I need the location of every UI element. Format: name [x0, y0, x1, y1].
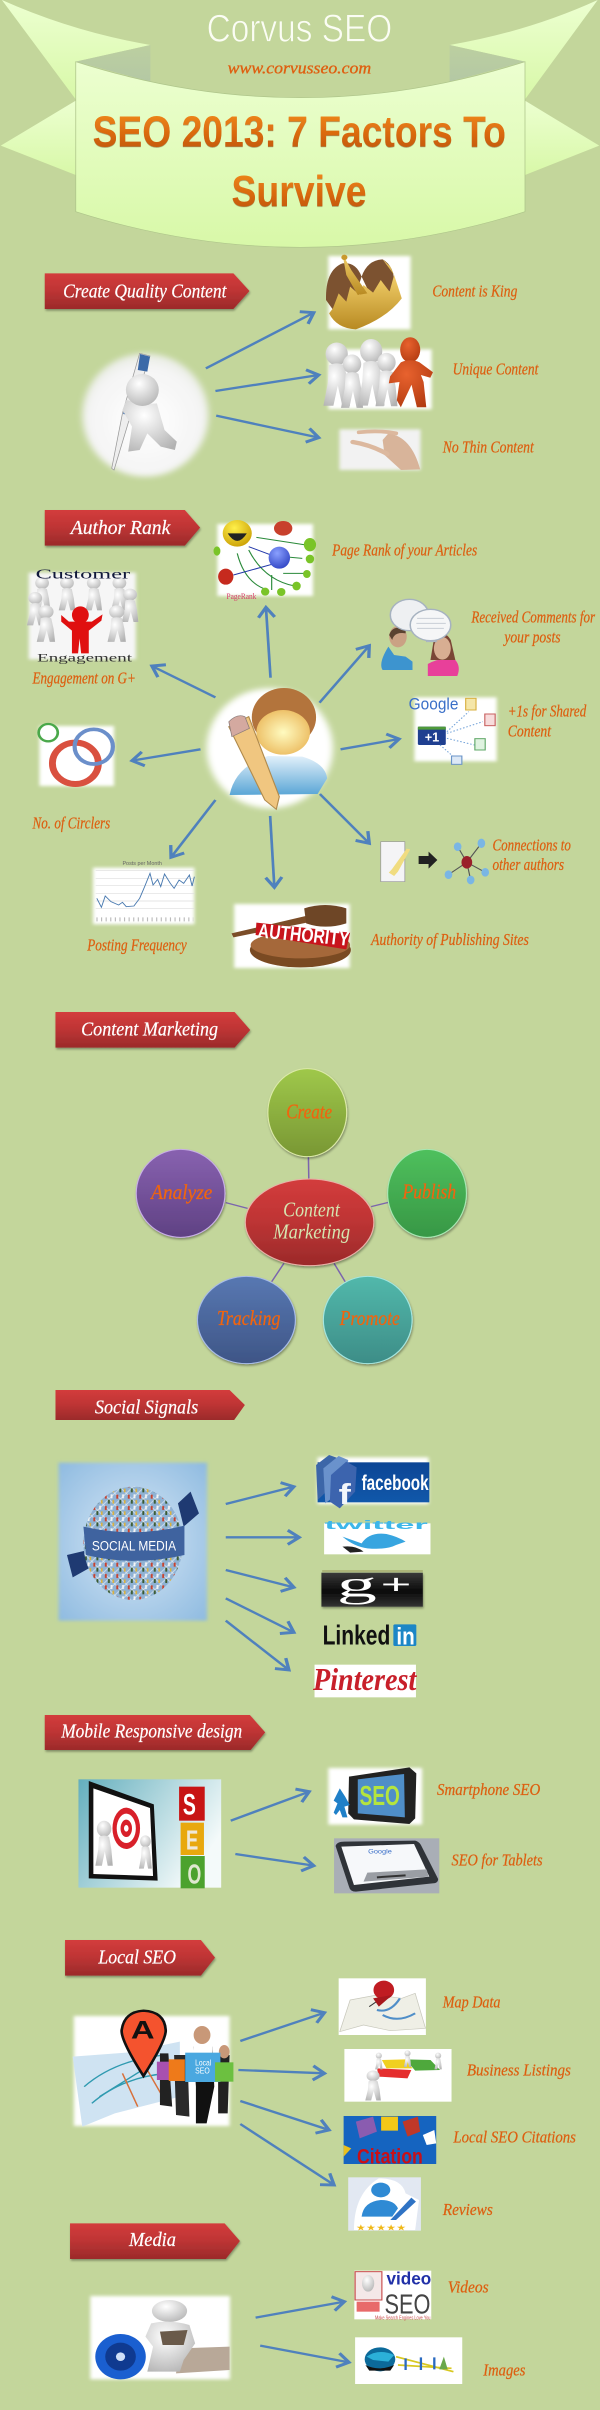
- arrow: to map data: [240, 2013, 324, 2041]
- text: content is king: Content is King: [432, 282, 517, 300]
- icon: business listings puzzle: [344, 2049, 452, 2102]
- heading: media: Media: [128, 2228, 176, 2251]
- ribbon right back tail: [450, 0, 598, 99]
- icon: smartphone seo: SEO: [360, 1781, 400, 1811]
- node: analyze: Analyze: [149, 1180, 212, 1204]
- icon: video seo: SEO: [385, 2289, 430, 2320]
- logo: linkedin: in: [396, 1624, 415, 1650]
- title: Survive: [232, 167, 367, 215]
- chart: posting frequency: Posts per Month: [122, 861, 162, 867]
- heading: social signals: Social Signals: [95, 1396, 198, 1418]
- logo: google plus: +: [381, 1570, 411, 1600]
- logo: pinterest: Pinterest: [312, 1662, 417, 1697]
- ribbon left back tail: [2, 0, 150, 99]
- text: unique content: Unique Content: [453, 360, 539, 378]
- text: connections to other authors: [492, 836, 571, 874]
- image: media figure with film reel: [90, 2296, 230, 2379]
- arrow: to local citations: [240, 2101, 329, 2130]
- icon: smartphone seo: [328, 1767, 422, 1825]
- text: map data: Map Data: [442, 1992, 501, 2011]
- arrow: to business listings: [238, 2070, 324, 2073]
- arrow: to videos: [256, 2302, 344, 2318]
- arrow: upper right: [320, 646, 369, 703]
- icon: citation: [344, 2116, 436, 2168]
- logo: linkedin: Linked: [323, 1620, 390, 1651]
- arrow: to unique content: [215, 375, 319, 391]
- heading: author rank: [45, 510, 200, 546]
- node: tracking: Tracking: [217, 1306, 280, 1330]
- icon: authority gavel: [232, 904, 351, 968]
- arrow: to google plus: [226, 1570, 294, 1587]
- icon: tablet seo: Google: [368, 1848, 392, 1856]
- text: authority of publishing sites: Authority of Publishing Sites: [370, 930, 529, 949]
- icon: google plus one: +1: [425, 731, 439, 745]
- logo: facebook: f: [339, 1478, 352, 1511]
- icon: map with pin: [339, 1978, 426, 2035]
- heading: content marketing: Content Marketing: [81, 1018, 218, 1040]
- heading: create quality content: [45, 273, 249, 309]
- heading: content marketing: [55, 1012, 250, 1048]
- arrow: to twitter: [226, 1534, 299, 1541]
- text: videos: Videos: [448, 2277, 489, 2296]
- image: mobile seo tablet and cubes: [78, 1779, 221, 1890]
- heading: social signals: [55, 1390, 245, 1420]
- icon: unique content figures: [323, 337, 433, 409]
- text: seo for tablets: SEO for Tablets: [452, 1851, 543, 1869]
- arrow: up: [266, 607, 271, 678]
- image: social media globe: [59, 1463, 207, 1621]
- panel: author rank: [27, 510, 596, 968]
- arrow: to pinterest: [226, 1621, 289, 1670]
- arrow: down: [270, 816, 274, 887]
- node: content marketing centre: [245, 1179, 374, 1266]
- heading: author rank: Author Rank: [69, 516, 171, 539]
- text: images: Images: [482, 2361, 525, 2379]
- icon: connections: [381, 839, 489, 884]
- text: +1s for shared content: Content: [508, 722, 552, 740]
- panel: header banner: [1, 0, 599, 247]
- icon: authority gavel: AUTHORITY: [257, 920, 351, 950]
- node: create: [268, 1069, 347, 1157]
- arrow: to linkedin: [226, 1598, 294, 1632]
- ribbon left lower tail: [1, 101, 76, 175]
- logo: twitter: [324, 1518, 430, 1554]
- logo: google plus: g: [337, 1564, 377, 1605]
- icon: tablet seo: [334, 1838, 439, 1893]
- text: connections to other authors: other authors: [492, 855, 564, 874]
- icon: video seo: [354, 2269, 431, 2321]
- text: received comments: [471, 607, 596, 646]
- heading: mobile responsive design: [45, 1715, 265, 1750]
- text: smartphone seo: Smartphone SEO: [437, 1780, 540, 1799]
- icon: page rank network: PageRank: [227, 592, 257, 601]
- icon: thin pinch hand: [339, 429, 421, 470]
- title: [93, 108, 506, 215]
- icon: customer engagement: Engagement: [37, 651, 133, 664]
- icon: man with pen: [82, 353, 209, 477]
- text: no thin content: No Thin Content: [442, 437, 535, 456]
- logo: google plus: [321, 1564, 423, 1607]
- node: create: Create: [286, 1100, 332, 1123]
- icon: author with pencil: [207, 688, 333, 809]
- image: local seo map and people: [73, 2011, 233, 2127]
- icon: google plus one: [409, 694, 497, 764]
- image: social media globe: SOCIAL MEDIA: [92, 1539, 177, 1554]
- node: promote: Promote: [339, 1306, 400, 1330]
- main banner: [76, 62, 525, 247]
- icon: customer engagement: Customer: [36, 568, 130, 582]
- text: page rank of your articles: Page Rank of your Articles: [331, 541, 477, 559]
- node: promote: [323, 1276, 412, 1364]
- icon: reviews: ★★★★★: [356, 2224, 406, 2233]
- heading: create quality content: Create Quality Content: [63, 280, 227, 302]
- arrow: to reviews: [240, 2124, 334, 2185]
- image: local seo map and people: SEO: [195, 2066, 210, 2075]
- arrow: to content is king: [206, 313, 314, 368]
- website url: www.corvusseo.com: [228, 58, 371, 78]
- ribbon left fold: [76, 45, 150, 82]
- panel: local seo and media: [65, 1940, 576, 2384]
- arrow: to smartphone seo: [231, 1792, 309, 1821]
- image: local seo map and people: Local: [195, 2058, 211, 2068]
- node: publish: [388, 1149, 466, 1237]
- arrow: to seo for tablets: [235, 1854, 314, 1866]
- panel: social signals and mobile: [45, 1390, 543, 1893]
- logo: facebook: facebook: [362, 1470, 429, 1495]
- panel: content marketing: [55, 1012, 466, 1364]
- text: business listings: Business Listings: [467, 2061, 571, 2079]
- chart: posting frequency: [93, 861, 194, 924]
- heading: local seo: [65, 1940, 215, 1976]
- heading: media: [70, 2223, 240, 2259]
- heading: mobile responsive design: Mobile Responsive design: [60, 1720, 242, 1742]
- node: tracking: [197, 1276, 295, 1364]
- text: no. of circlers: No. of Circlers: [32, 813, 110, 832]
- heading: local seo: Local SEO: [98, 1946, 176, 1968]
- text: received comments: your posts: [503, 627, 561, 646]
- icon: google circles: [39, 724, 114, 786]
- node: content marketing centre: Content: [283, 1198, 340, 1221]
- arrow: to images: [260, 2346, 349, 2362]
- arrow: lower left: [171, 800, 215, 857]
- connector lines: [226, 1157, 388, 1282]
- icon: google plus one: Google: [409, 694, 458, 713]
- icon: video seo: Make Search Engines Love You: [375, 2316, 430, 2321]
- image: mobile seo tablet and cubes: E: [186, 1825, 198, 1856]
- arrow: lower right: [320, 794, 369, 843]
- icon: customer engagement: [27, 568, 138, 664]
- ribbon right fold: [450, 45, 525, 82]
- icon: video seo: video: [386, 2269, 431, 2288]
- ribbon right lower tail: [525, 101, 599, 175]
- node: publish: Publish: [402, 1180, 456, 1203]
- text: reviews: Reviews: [442, 2200, 493, 2219]
- image: mobile seo tablet and cubes: O: [187, 1859, 201, 1890]
- arrow: right: [341, 739, 399, 749]
- icon: reviews: [348, 2177, 421, 2233]
- panel: create quality content: [45, 254, 539, 477]
- icon: images globe: [355, 2337, 462, 2384]
- image: local seo map and people: A: [131, 2015, 155, 2044]
- icon: citation: Citation: [357, 2144, 423, 2168]
- icon: crown: [326, 254, 411, 329]
- text: +1s for shared content: [508, 702, 587, 740]
- image: mobile seo tablet and cubes: S: [183, 1787, 196, 1821]
- arrow: to facebook: [226, 1487, 294, 1504]
- arrow: upper left: [152, 666, 215, 697]
- logo text: Corvus SEO: [207, 6, 392, 50]
- text: posting frequency: Posting Frequency: [87, 936, 187, 954]
- node: content marketing centre: Marketing: [272, 1220, 350, 1243]
- logo: twitter: twitter: [324, 1518, 428, 1532]
- icon: comment bubbles: [381, 599, 459, 676]
- icon: page rank network: [214, 520, 316, 601]
- text: engagement on g+: Engagement on G+: [32, 668, 136, 687]
- logo: facebook: [316, 1455, 429, 1511]
- arrow: to no thin content: [216, 416, 319, 438]
- arrow: left: [132, 749, 201, 761]
- node: analyze: [136, 1149, 225, 1237]
